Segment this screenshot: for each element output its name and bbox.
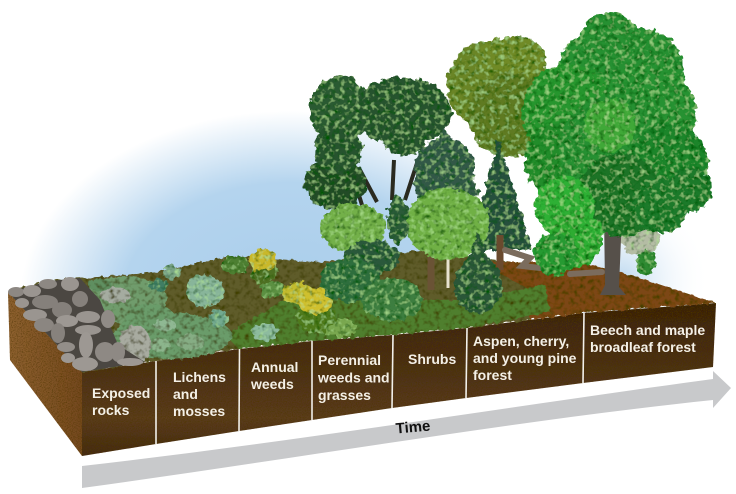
annual weeds <box>148 256 356 341</box>
fallen logs <box>505 250 602 274</box>
label: aspen, cherry, and young pine forest: Aspen, cherry, <box>473 333 569 349</box>
label: beech and maple broadleaf forest: broadleaf forest <box>590 339 696 355</box>
label: exposed rocks: rocks <box>92 402 130 418</box>
bright young beech <box>534 177 604 276</box>
label: lichens and mosses: and <box>173 386 198 402</box>
background trees with dark canopy <box>304 76 452 209</box>
beech tree <box>522 12 712 295</box>
soil front face <box>82 303 716 456</box>
label: perennial weeds and grasses: Perennial <box>318 352 381 368</box>
young trees trunks <box>431 235 500 290</box>
dark oak canopies <box>304 76 452 209</box>
small flowering tree <box>620 225 660 275</box>
perennial weeds <box>283 281 335 333</box>
dark tree trunks <box>347 160 418 205</box>
beech trunk <box>600 215 626 295</box>
label: perennial weeds and grasses: grasses <box>318 387 371 403</box>
soil left side <box>8 292 82 456</box>
label: lichens and mosses: Lichens <box>173 369 226 385</box>
label: aspen, cherry, and young pine forest: and young pine <box>473 350 577 366</box>
label: shrubs: Shrubs <box>408 351 456 367</box>
aspen and cherry trees <box>321 188 490 260</box>
label: annual weeds: weeds <box>250 376 294 392</box>
label: lichens and mosses: mosses <box>173 403 225 419</box>
shrubs <box>319 240 422 321</box>
label: annual weeds: Annual <box>251 359 298 375</box>
grass patches <box>225 285 550 349</box>
young pine <box>454 232 502 313</box>
vertical stage dividers <box>156 313 584 444</box>
beech canopy <box>522 12 712 237</box>
lichens and mosses <box>83 276 232 365</box>
label: beech and maple broadleaf forest: Beech and maple <box>590 322 705 338</box>
olive tree <box>447 36 552 157</box>
ground surface <box>8 250 716 372</box>
time arrow <box>82 371 731 488</box>
label: perennial weeds and grasses: weeds and <box>317 370 390 386</box>
time label: Time <box>395 418 431 437</box>
label: exposed rocks: Exposed <box>92 385 150 401</box>
label: aspen, cherry, and young pine forest: forest <box>473 367 512 383</box>
brown leaf litter <box>480 262 716 320</box>
yellow weed top <box>249 249 277 284</box>
exposed rocks <box>8 277 145 372</box>
conifers <box>412 126 532 250</box>
soil block <box>8 292 716 456</box>
